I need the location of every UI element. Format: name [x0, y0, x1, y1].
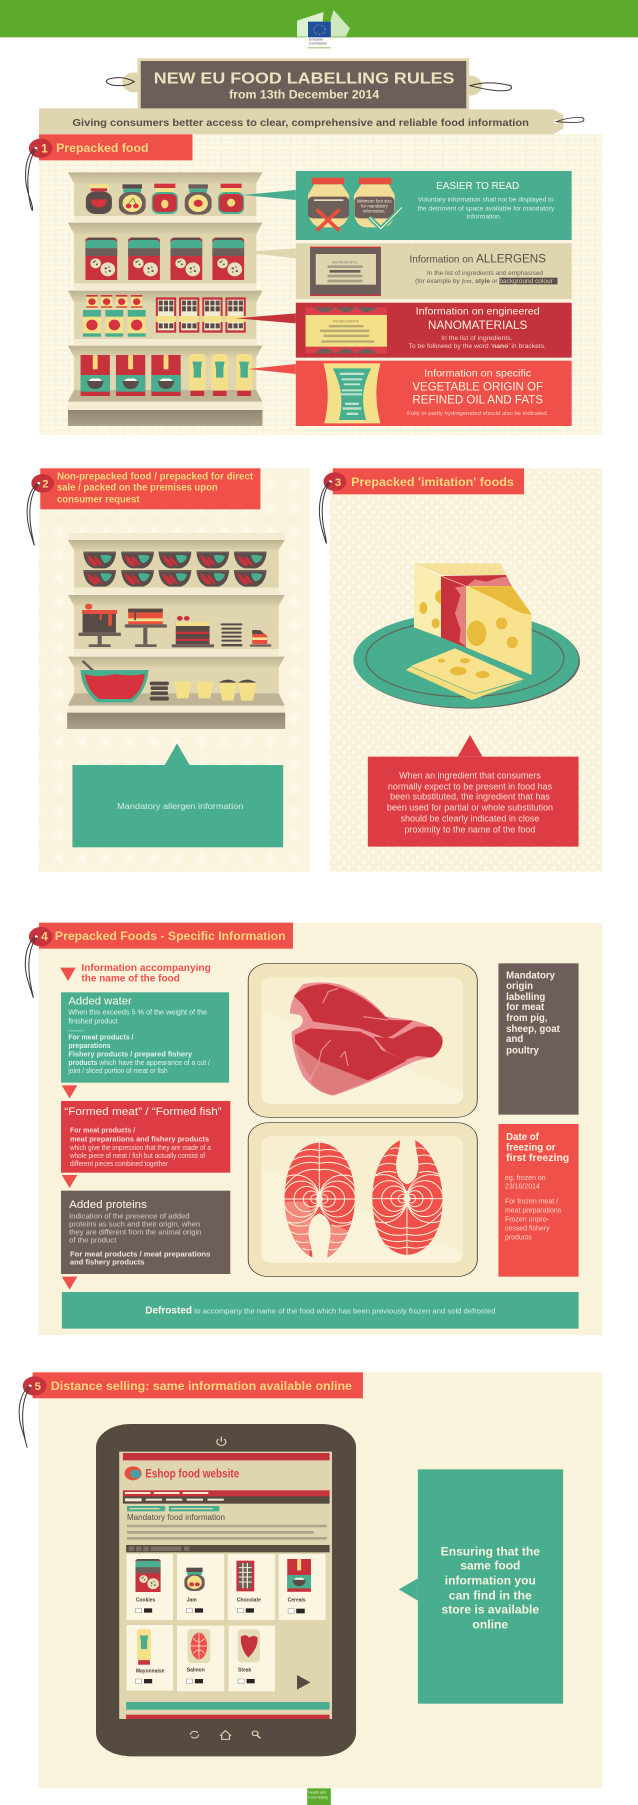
info box: allergens: In the list of ingredients and emphasised [427, 270, 543, 277]
info box: vegetable oil: REFINED OIL AND FATS [412, 393, 543, 406]
callout: imitation text: been used for partial or whole substitution [387, 803, 553, 813]
icon: power [217, 1437, 226, 1445]
arrow [62, 1085, 77, 1098]
blurred text [127, 1525, 327, 1540]
box: added proteins: they are different from the animal origin [69, 1228, 202, 1236]
box: added proteins: Indication of the presence of added [69, 1212, 190, 1220]
icon: nano label: INGREDIENTS [333, 320, 359, 324]
icon: oil label [323, 363, 380, 423]
box: formed meat: meat preparations and fishery products [70, 1135, 210, 1143]
info box: vegetable oil: Information on specific [424, 369, 531, 379]
callout: ensuring same information: Ensuring that the [441, 1545, 540, 1558]
icon: nano label [306, 307, 387, 353]
info box: nanomaterials: In the list of ingredients. [441, 334, 512, 342]
icon: jars comparison: information. [363, 208, 386, 213]
icon: allergen label: INGREDIENTS: [332, 260, 358, 264]
panel: 5 distance selling [19, 1372, 602, 1805]
icon: next arrow [297, 1675, 310, 1690]
product cards: Cereals [288, 1598, 306, 1604]
footer badge [307, 1788, 331, 1805]
cookie boxes [85, 238, 244, 280]
info box: easier to read: information. [467, 214, 502, 221]
footer badge: Food Safety [308, 1796, 328, 1800]
box: origin labelling: origin [506, 981, 533, 992]
box: origin labelling: for meat [506, 1002, 545, 1013]
callout: ensuring same information [399, 1469, 563, 1704]
supermarket shelves [68, 172, 262, 426]
arrow [62, 1277, 77, 1290]
callout: allergen information [72, 743, 283, 847]
box: origin labelling: and [506, 1034, 523, 1045]
section tag 3 [319, 468, 524, 543]
subheading [60, 963, 211, 984]
box: added water: finished product [68, 1019, 118, 1026]
box: formed meat: different pieces combined together [70, 1160, 168, 1168]
box: date of freezing: freezing or [506, 1142, 556, 1153]
info box: allergens: Information on ALLERGENS [410, 253, 546, 266]
tins and chocolate bars [83, 295, 246, 337]
section tag 4: Prepacked Foods - Specific Information [55, 929, 286, 943]
product cards: Cookies [136, 1598, 156, 1604]
box: formed meat: whole piece of meat / fish but actually consist of [69, 1152, 206, 1160]
box: added proteins: and fishery products [70, 1258, 145, 1266]
product cards: Mayonnaise [136, 1669, 165, 1675]
box: added water [61, 992, 229, 1083]
box: date of freezing: products [505, 1235, 532, 1242]
header bar [0, 0, 638, 37]
title plaque: from 13th December 2014 [229, 88, 380, 101]
box: date of freezing: eg. frozen on [505, 1175, 546, 1182]
box: added proteins [61, 1191, 230, 1274]
callout: ensuring same information: information you [445, 1574, 536, 1587]
jars [86, 184, 244, 215]
section tag 2: Non-prepacked food / prepacked for direct [57, 471, 253, 482]
icon: jars comparison: for mandatory [361, 203, 389, 208]
section tag 2 [27, 468, 260, 545]
box: added proteins: Added proteins [69, 1198, 147, 1211]
callout: ensuring same information: store is available [441, 1603, 539, 1616]
deli shelves [67, 533, 285, 729]
section tag 5: Distance selling: same information available online [51, 1379, 352, 1393]
section tag 2: 2 [42, 478, 49, 490]
icon: allergen label [310, 247, 381, 296]
info box: allergens: (for example by font, style or background colour) [415, 278, 555, 285]
info box: vegetable oil [248, 361, 572, 426]
callout: ensuring same information: online [472, 1618, 508, 1631]
box: origin labelling [498, 963, 579, 1115]
tablet [96, 1424, 356, 1756]
box: added water: preparations [68, 1043, 111, 1050]
icon: European Commission logo: Commission [309, 42, 327, 46]
section tag 1: 1 [41, 141, 48, 155]
box: formed meat: which give the impression that they are made of a [69, 1144, 211, 1152]
info box: easier to read: the detriment of space available for mandatory [417, 206, 555, 213]
section tag 1 [26, 134, 192, 210]
box: origin labelling: sheep, goat [506, 1024, 561, 1035]
callout: imitation text: When an ingredient that consumers [399, 771, 541, 781]
panel: 3 imitation foods [319, 468, 602, 872]
footer badge: Health and [308, 1790, 326, 1794]
box: origin labelling: from pig, [506, 1013, 548, 1024]
section tag 5 [19, 1372, 363, 1447]
subtitle ribbon: Giving consumers better access to clear, comprehensive and reliable food information [72, 118, 529, 129]
section tag 4 [25, 923, 293, 998]
box: added water: Fishery products / prepared fishery [68, 1050, 193, 1058]
info box: nanomaterials: Information on engineered [416, 307, 540, 317]
icon: jars comparison [308, 178, 402, 231]
product cards: Jam [187, 1598, 197, 1604]
box: date of freezing: Frozen unpro- [505, 1217, 549, 1224]
box: date of freezing: meat preparations [505, 1208, 562, 1215]
tablet: Mandatory food information [127, 1513, 225, 1522]
title plaque: NEW EU FOOD LABELLING RULES [154, 69, 455, 87]
product cards [127, 1554, 326, 1691]
box: added water: When this exceeds 5 % of the weight of the [68, 1008, 207, 1016]
subheading: the name of the food [81, 974, 180, 984]
bar: defrosted: Defrosted [145, 1306, 192, 1316]
cereal boxes and bottles [81, 354, 252, 396]
box: added water: joint / sliced portion of meat or fish [68, 1067, 168, 1075]
subtitle ribbon [39, 108, 584, 134]
box: added water: Added water [68, 994, 132, 1007]
box: origin labelling: poultry [506, 1045, 539, 1056]
product cards: Steak [238, 1668, 252, 1674]
info box: easier to read: Voluntary information shall not be displayed to [418, 197, 554, 204]
product cards: Chocolate [237, 1598, 261, 1604]
tray: steak [248, 963, 477, 1117]
bar: defrosted [62, 1292, 579, 1329]
box: origin labelling: Mandatory [506, 971, 556, 982]
section tag 3: 3 [335, 477, 341, 489]
section tag 5: 5 [35, 1381, 41, 1393]
box: added proteins: proteins as such and their origin, when [69, 1220, 201, 1228]
box: date of freezing: For frozen meat / [505, 1199, 558, 1206]
icon: European Commission logo: European [309, 38, 323, 42]
box: formed meat: “Formed meat” / “Formed fish” [64, 1105, 222, 1118]
box: date of freezing: cessed fishery [505, 1226, 550, 1233]
box: date of freezing [498, 1124, 579, 1277]
info box: allergens [244, 243, 572, 299]
icon: jars comparison: Minimum font size [357, 199, 392, 204]
info box: easier to read [242, 171, 572, 240]
info box: easier to read: EASIER TO READ [436, 181, 519, 192]
box: added water: products which have the appearance of a cut / [68, 1059, 211, 1067]
bar: defrosted: to accompany the name of the food which has been previously frozen and sold defrosted [194, 1306, 496, 1315]
callout: imitation text: been substituted, the ingredient that has [390, 792, 550, 802]
info box: nanomaterials: To be followed by the word ‘nano’ in brackets. [409, 342, 546, 350]
panel: 4 specific information [25, 923, 602, 1335]
cakes [79, 604, 271, 647]
panel: 2 non-prepacked food [27, 468, 310, 872]
icon: European Commission logo [297, 10, 350, 48]
cheese on plate [353, 563, 580, 709]
section tag 2: consumer request [57, 494, 140, 505]
tablet icons [190, 1731, 260, 1739]
callout: imitation text: normally expect to be present in food has [388, 782, 553, 792]
box: date of freezing: first freezing [506, 1153, 569, 1164]
salad bowls [83, 552, 267, 587]
callout: ensuring same information: can find in the [449, 1589, 532, 1602]
subheading: Information accompanying [81, 963, 211, 974]
callout: imitation text [368, 735, 579, 847]
title plaque [106, 58, 511, 112]
mixing bowl and cups [81, 662, 256, 702]
product cards: Salmon [187, 1668, 205, 1674]
website header [123, 1466, 330, 1511]
section tag 2: sale / packed on the premises upon [57, 483, 218, 493]
panel: 1 prepacked food [26, 134, 602, 435]
section tag 3: Prepacked 'imitation' foods [351, 475, 514, 489]
callout: imitation text: proximity to the name of the food [405, 825, 535, 835]
box: formed meat: For meat products / [70, 1128, 135, 1135]
website header: Eshop food website [145, 1467, 239, 1480]
box: added water: For meat products / [68, 1035, 134, 1042]
box: added proteins: of the product [69, 1236, 117, 1244]
arrow [62, 1175, 77, 1188]
box: date of freezing: Date of [506, 1132, 540, 1143]
callout: allergen information: Mandatory allergen information [117, 802, 243, 812]
box: added proteins: For meat products / meat preparations [70, 1250, 211, 1258]
box: date of freezing: 23/10/2014 [505, 1184, 540, 1191]
info box: nanomaterials [236, 303, 572, 358]
box: formed meat [61, 1101, 230, 1173]
box: origin labelling: labelling [506, 992, 545, 1003]
callout: ensuring same information: same food [460, 1559, 520, 1572]
section tag 4: 4 [41, 929, 48, 943]
info box: vegetable oil: VEGETABLE ORIGIN OF [412, 380, 543, 393]
info box: vegetable oil: Fully or partly hydrogenated should also be indicated. [407, 411, 549, 417]
section tag 1: Prepacked food [56, 141, 149, 155]
tray: salmon [248, 1123, 477, 1277]
callout: imitation text: should be clearly indicated in close [401, 814, 539, 824]
info box: nanomaterials: NANOMATERIALS [428, 318, 527, 332]
